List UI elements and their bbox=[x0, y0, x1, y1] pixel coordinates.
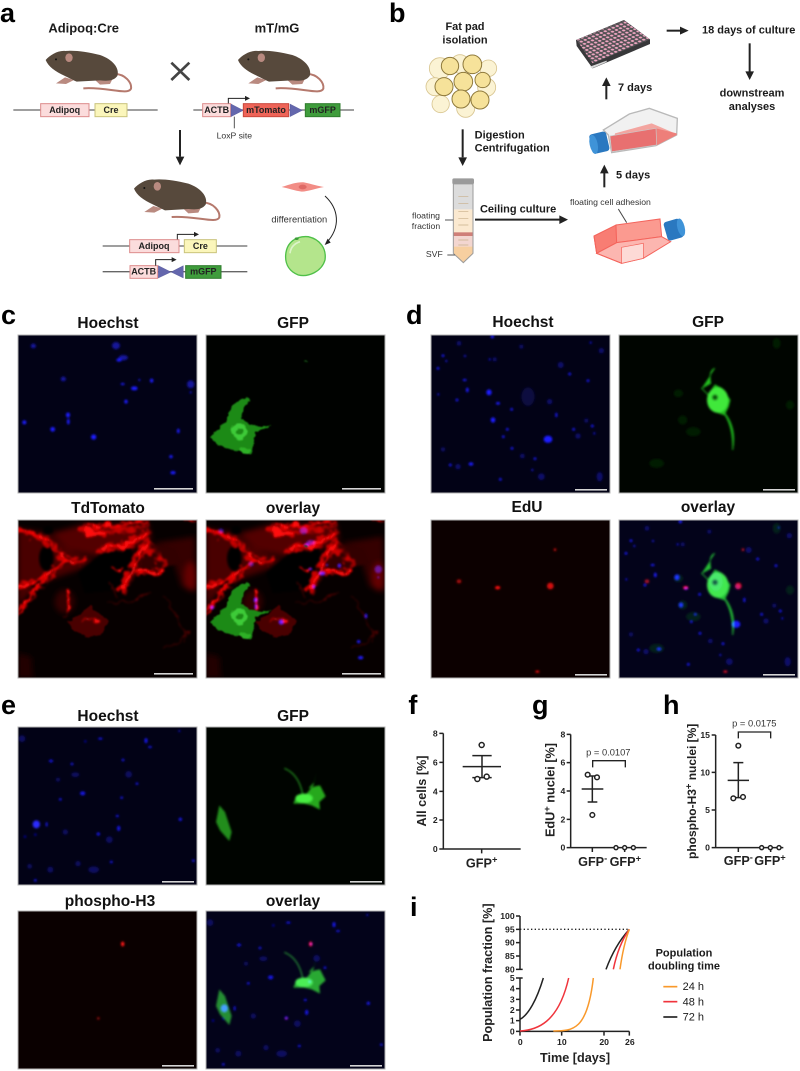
chart i: population fraction over time: 0 bbox=[518, 1037, 523, 1047]
chart f: all cells: 2 bbox=[433, 815, 438, 825]
gene construct: recombined Adipoq Cre: Cre bbox=[193, 241, 208, 251]
panel e: GFP image: GFP bbox=[277, 708, 309, 725]
icon: inverted flask bbox=[594, 218, 687, 263]
chart g: EdU nuclei: + bbox=[542, 806, 552, 812]
panel c: Hoechst image: Hoechst bbox=[77, 315, 139, 332]
chart i: population fraction over time: Population fraction [%] bbox=[481, 903, 495, 1042]
text: digestion centrifugation bbox=[475, 129, 550, 155]
chart i: population fraction over time: 90 bbox=[505, 938, 515, 948]
chart f: all cells: GFP bbox=[466, 856, 492, 870]
text: 7 days: 7 days bbox=[618, 82, 652, 94]
text: 18 days of culture: 18 days of culture bbox=[702, 24, 795, 36]
label d: d bbox=[406, 300, 422, 330]
panel b: culture workflow bbox=[389, 0, 795, 263]
panel d: EdU image: EdU bbox=[512, 499, 542, 516]
arrow: 7 days bbox=[602, 77, 611, 99]
icon: fibroblast bbox=[282, 182, 324, 192]
chart f: all cells: 8 bbox=[433, 728, 438, 738]
panel c: overlay image: overlay bbox=[266, 500, 321, 517]
panel e: GFP image bbox=[206, 708, 385, 885]
text: fat pad isolation bbox=[442, 21, 488, 46]
text: digestion centrifugation: Centrifugation bbox=[475, 143, 550, 155]
arrow: ceiling culture bbox=[475, 215, 568, 224]
label i: i bbox=[410, 892, 418, 922]
panel d: overlay image bbox=[619, 499, 798, 678]
labels: tube fractions: fraction bbox=[412, 221, 440, 231]
panel d: GFP image: GFP bbox=[692, 314, 724, 331]
chart i: population fraction over time: 10 bbox=[557, 1037, 567, 1047]
labels: tube fractions bbox=[412, 210, 455, 259]
gene construct: Adipoq Cre: Cre bbox=[104, 105, 118, 115]
panel d: GFP image bbox=[619, 314, 798, 493]
chart i: population fraction over time: 80 bbox=[505, 964, 515, 974]
chart g: EdU nuclei: EdU bbox=[544, 812, 558, 837]
label f: f bbox=[408, 690, 418, 720]
panel e: Hoechst image: Hoechst bbox=[77, 708, 139, 725]
text: downstream analyses: analyses bbox=[729, 101, 775, 113]
chart g: EdU nuclei: 4 bbox=[561, 786, 566, 796]
gene construct: Adipoq Cre bbox=[13, 104, 158, 117]
legend: population doubling time bbox=[648, 948, 720, 1024]
gene construct: ACTB mTomato mGFP bbox=[193, 98, 354, 140]
panel d: Hoechst image: Hoechst bbox=[492, 314, 554, 331]
legend: population doubling time: Population bbox=[656, 948, 713, 960]
chart g: EdU nuclei: 2 bbox=[561, 814, 566, 824]
text: downstream analyses bbox=[720, 88, 785, 113]
panel e: overlay image bbox=[206, 893, 385, 1069]
arrow: differentiation bbox=[325, 196, 336, 245]
gene construct: recombined ACTB mGFP bbox=[103, 260, 247, 278]
chart i: population fraction over time: 85 bbox=[505, 951, 515, 961]
chart f: all cells: All cells [%] bbox=[415, 755, 429, 827]
chart i: population fraction over time: 4 bbox=[510, 984, 515, 994]
chart h: phospho-H3 nuclei: + bbox=[780, 852, 786, 862]
heading: mT/mG: mT/mG bbox=[255, 21, 299, 36]
icon: well plate bbox=[576, 20, 650, 68]
gene construct: ACTB mTomato mGFP: ACTB bbox=[204, 105, 230, 115]
labels: tube fractions: floating bbox=[412, 210, 440, 220]
chart i: population fraction over time bbox=[481, 903, 720, 1065]
panel e: phospho-H3 image bbox=[18, 893, 197, 1069]
panel d: overlay image: overlay bbox=[681, 499, 736, 516]
text: downstream analyses: downstream bbox=[720, 88, 785, 100]
chart i: population fraction over time: 0 bbox=[510, 1026, 515, 1036]
chart g: EdU nuclei: GFP bbox=[610, 855, 636, 869]
chart h: phospho-H3 nuclei: 0 bbox=[705, 843, 710, 853]
panel d: Hoechst image bbox=[431, 314, 610, 493]
chart f: all cells: 0 bbox=[433, 844, 438, 854]
panel c: overlay image bbox=[206, 500, 385, 678]
gene construct: ACTB mTomato mGFP: mGFP bbox=[309, 105, 336, 115]
heading: Adipoq:Cre: Adipoq:Cre bbox=[48, 21, 119, 36]
chart f: all cells: 4 bbox=[433, 786, 438, 796]
panel c: TdTomato image bbox=[18, 500, 197, 678]
chart g: EdU nuclei: 8 bbox=[561, 729, 566, 739]
panel c: GFP image: GFP bbox=[277, 315, 309, 332]
gene construct: recombined Adipoq Cre bbox=[103, 234, 247, 253]
chart h: phospho-H3 nuclei: phospho-H3 bbox=[685, 789, 699, 859]
icon: fat cells bbox=[426, 55, 497, 117]
label g: g bbox=[532, 690, 548, 720]
label c: c bbox=[1, 300, 16, 330]
chart g: EdU nuclei: GFP bbox=[578, 855, 604, 869]
chart g: EdU nuclei: + bbox=[636, 853, 642, 863]
label e: e bbox=[1, 690, 16, 720]
chart i: population fraction over time: 26 bbox=[625, 1037, 635, 1047]
panel e: overlay image: overlay bbox=[266, 893, 321, 910]
gene construct: ACTB mTomato mGFP: LoxP site bbox=[217, 130, 252, 140]
chart g: EdU nuclei: 0 bbox=[561, 843, 566, 853]
chart g: EdU nuclei: - bbox=[604, 853, 607, 863]
chart g: EdU nuclei: p = 0.0107 bbox=[586, 748, 631, 758]
chart g: EdU nuclei bbox=[542, 729, 647, 869]
panel e: Hoechst image bbox=[18, 708, 197, 885]
chart h: phospho-H3 nuclei: 10 bbox=[700, 767, 710, 777]
gene construct: ACTB mTomato mGFP: mTomato bbox=[246, 105, 286, 115]
panel e: phospho-H3 image: phospho-H3 bbox=[65, 893, 156, 910]
chart h: phospho-H3 nuclei: p = 0.0175 bbox=[732, 719, 777, 729]
legend: population doubling time: 72 h bbox=[683, 1012, 704, 1024]
arrow: to 18 days bbox=[667, 27, 689, 35]
panel c: GFP image bbox=[206, 315, 385, 493]
chart h: phospho-H3 nuclei: nuclei [%] bbox=[685, 724, 699, 784]
chart i: population fraction over time: Time [days] bbox=[540, 1051, 610, 1065]
icon: Adipoq:Cre mouse bbox=[46, 51, 131, 91]
chart i: population fraction over time: 100 bbox=[500, 911, 515, 921]
chart i: population fraction over time: 1 bbox=[510, 1016, 515, 1026]
chart f: all cells: 6 bbox=[433, 757, 438, 767]
text: ceiling culture: Ceiling culture bbox=[480, 203, 556, 215]
chart h: phospho-H3 nuclei: - bbox=[750, 852, 753, 862]
panel c: Hoechst image bbox=[18, 315, 197, 493]
text: differentiation: differentiation bbox=[271, 215, 327, 225]
text: fat pad isolation: Fat pad bbox=[445, 21, 485, 33]
icon: centrifuge tube bbox=[452, 178, 474, 263]
chart i: population fraction over time: 95 bbox=[505, 924, 515, 934]
chart h: phospho-H3 nuclei: + bbox=[683, 783, 693, 789]
panel a: breeding scheme bbox=[0, 0, 354, 278]
chart h: phospho-H3 nuclei: GFP bbox=[754, 854, 780, 868]
icon: adipocyte bbox=[286, 237, 325, 276]
legend: population doubling time: doubling time bbox=[648, 960, 720, 972]
arrow: cross to offspring bbox=[176, 130, 184, 165]
legend: population doubling time: 48 h bbox=[683, 996, 704, 1008]
panel c: TdTomato image: TdTomato bbox=[71, 500, 145, 517]
gene construct: recombined ACTB mGFP: mGFP bbox=[190, 267, 217, 277]
arrow: to analyses bbox=[745, 43, 754, 80]
chart f: all cells bbox=[415, 728, 521, 870]
label: floating cell adhesion: floating cell adhesion bbox=[570, 197, 651, 207]
text: fat pad isolation: isolation bbox=[442, 34, 488, 46]
text: 5 days: 5 days bbox=[616, 170, 650, 182]
chart f: all cells: + bbox=[492, 855, 498, 865]
text: digestion centrifugation: Digestion bbox=[475, 129, 525, 141]
gene construct: Adipoq Cre: Adipoq bbox=[49, 105, 80, 115]
gene construct: recombined ACTB mGFP: ACTB bbox=[131, 267, 157, 277]
icon: offspring mouse bbox=[134, 179, 219, 220]
chart g: EdU nuclei: nuclei [%] bbox=[544, 743, 558, 806]
chart h: phospho-H3 nuclei: GFP bbox=[724, 854, 750, 868]
arrow: digestion bbox=[458, 129, 467, 166]
chart h: phospho-H3 nuclei bbox=[683, 719, 786, 868]
legend: population doubling time: 24 h bbox=[683, 981, 704, 993]
labels: tube fractions: SVF bbox=[426, 249, 443, 259]
icon: cross symbol bbox=[171, 63, 189, 80]
chart i: population fraction over time: 3 bbox=[510, 994, 515, 1004]
icon: upright flask bbox=[588, 108, 677, 155]
chart g: EdU nuclei: 6 bbox=[561, 758, 566, 768]
label: floating cell adhesion bbox=[570, 197, 651, 223]
label h: h bbox=[663, 690, 679, 720]
charts f g h bbox=[408, 690, 786, 870]
chart i: population fraction over time: 20 bbox=[599, 1037, 609, 1047]
panel d: EdU image bbox=[431, 499, 610, 678]
chart h: phospho-H3 nuclei: 15 bbox=[700, 730, 710, 740]
chart i: population fraction over time: 2 bbox=[510, 1005, 515, 1015]
chart h: phospho-H3 nuclei: 5 bbox=[705, 805, 710, 815]
gene construct: recombined Adipoq Cre: Adipoq bbox=[139, 241, 169, 251]
icon: mT/mG mouse bbox=[238, 51, 323, 91]
arrow: 5 days bbox=[600, 165, 609, 187]
chart i: population fraction over time: 5 bbox=[510, 973, 515, 983]
